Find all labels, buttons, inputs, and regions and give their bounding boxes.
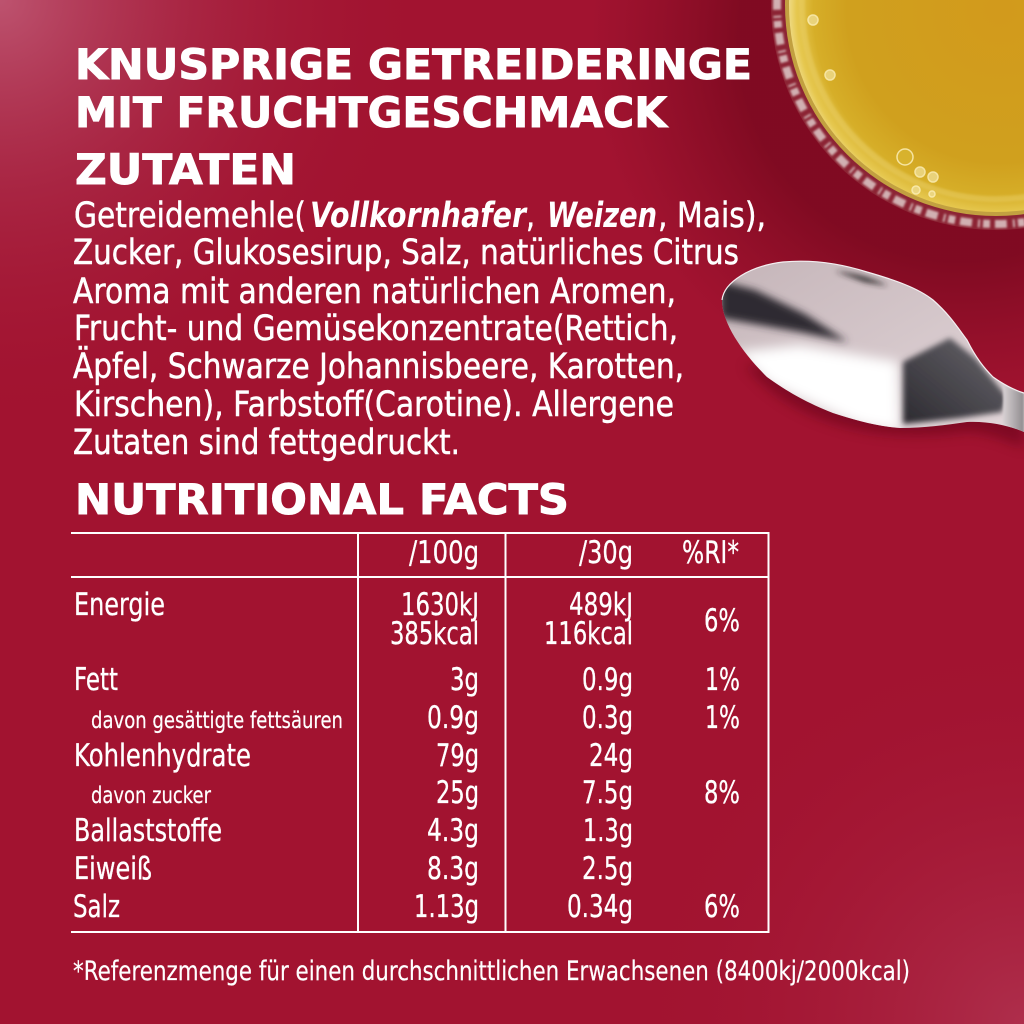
table header row: [409, 535, 739, 571]
nutrition table: [71, 533, 768, 932]
row: Salz: 1.13g: [414, 889, 479, 925]
row: Energie: [74, 587, 740, 652]
row: Ballaststoffe: [74, 813, 633, 849]
table header row: %RI*: [682, 535, 739, 571]
title: MIT FRUCHTGESCHMACK: [75, 88, 668, 137]
row: davon zucker: 7.5g: [582, 775, 633, 811]
row: Ballaststoffe: Ballaststoffe: [74, 813, 222, 849]
text block: ingredients: Zucker, Glukosesirup, Salz, natürliches Citrus: [73, 233, 739, 273]
row: Fett: 1%: [705, 662, 740, 698]
row: davon zucker: 25g: [436, 775, 479, 811]
row: Fett: Fett: [74, 662, 118, 698]
row: Energie: Energie: [74, 587, 165, 623]
row: davon gesaettigte fettsaeuren: [91, 700, 740, 736]
row: Kohlenhydrate: [74, 738, 633, 774]
heading: Nutritional Facts: NUTRITIONAL FACTS: [75, 475, 569, 524]
row: Kohlenhydrate: 79g: [436, 738, 479, 774]
text block: ingredients: Aroma mit anderen natürlichen Aromen,: [73, 272, 676, 312]
row: Salz: Salz: [73, 889, 120, 925]
text block: ingredients: Äpfel, Schwarze Johannisbeere, Karotten,: [73, 345, 684, 387]
text block: ingredients: , Mais),: [658, 196, 766, 236]
row: davon gesaettigte fettsaeuren: davon gesättigte fettsäuren: [91, 708, 343, 734]
row: davon gesaettigte fettsaeuren: 0.9g: [427, 700, 479, 736]
row: davon zucker: davon zucker: [91, 783, 211, 809]
row: Salz: [73, 889, 740, 925]
row: Kohlenhydrate: 24g: [589, 738, 633, 774]
row: Eiweiss: 2.5g: [582, 851, 633, 887]
row: davon zucker: [91, 775, 740, 811]
title: [75, 40, 752, 137]
text block: ingredients: [73, 196, 766, 463]
row: Energie: 1630kJ: [401, 587, 479, 623]
row: Fett: 0.9g: [582, 662, 633, 698]
icon: spoon: [715, 255, 1024, 448]
table header row: /30g: [579, 535, 633, 571]
row: Eiweiss: 8.3g: [427, 851, 479, 887]
text block: ingredients: Zutaten sind fettgedruckt.: [73, 423, 460, 463]
title: KNUSPRIGE GETREIDERINGE: [75, 40, 752, 89]
row: davon gesaettigte fettsaeuren: 0.3g: [582, 700, 633, 736]
text block: ingredients: ,: [526, 196, 535, 236]
text block: ingredients: Weizen: [547, 196, 657, 236]
row: Energie: 489kJ: [569, 587, 633, 623]
table header row: /100g: [409, 535, 479, 571]
text block: ingredients: Vollkornhafer: [310, 196, 528, 236]
text block: ingredients: Frucht- und Gemüsekonzentrate(Rettich,: [74, 309, 678, 349]
row: Energie: 385kcal: [390, 616, 479, 652]
icon: glass of juice: [771, 0, 1024, 230]
text block: ingredients: Getreidemehle(: [74, 196, 306, 236]
row: Energie: 6%: [704, 603, 740, 639]
row: Fett: [74, 662, 740, 698]
row: Energie: 116kcal: [544, 616, 633, 652]
row: davon zucker: 8%: [704, 775, 740, 811]
text block: ingredients: Kirschen), Farbstoff(Carotine). Allergene: [74, 385, 674, 425]
row: Eiweiss: Eiweiß: [74, 851, 152, 887]
row: davon gesaettigte fettsaeuren: 1%: [705, 700, 740, 736]
row: Ballaststoffe: 4.3g: [427, 813, 479, 849]
row: Salz: 6%: [704, 889, 740, 925]
heading: Zutaten: ZUTATEN: [75, 145, 296, 194]
row: Ballaststoffe: 1.3g: [583, 813, 633, 849]
table grid: [71, 533, 768, 932]
row: Kohlenhydrate: Kohlenhydrate: [74, 738, 251, 774]
row: Eiweiss: [74, 851, 633, 887]
row: Fett: 3g: [450, 662, 479, 698]
row: Salz: 0.34g: [567, 889, 633, 925]
